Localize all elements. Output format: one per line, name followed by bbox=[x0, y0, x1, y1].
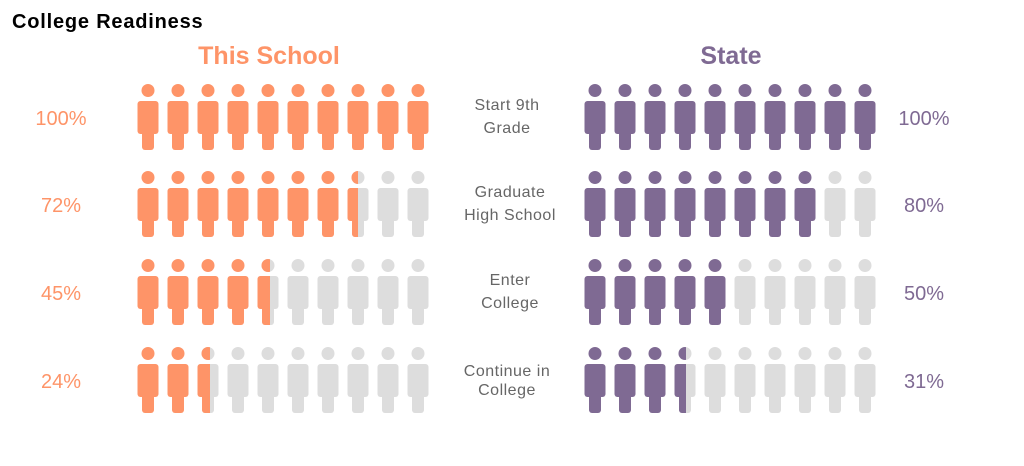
heading: State: State bbox=[700, 42, 762, 70]
row: Start 9th Grade: 100% bbox=[898, 108, 950, 130]
row: Start 9th Grade: Start 9th bbox=[475, 97, 539, 114]
row: Continue in College: 24% bbox=[41, 371, 81, 393]
row: Enter College bbox=[41, 259, 944, 325]
row: Enter College: College bbox=[481, 295, 539, 312]
row: Start 9th Grade: 100% bbox=[35, 108, 87, 130]
row: Graduate High School: 80% bbox=[904, 195, 944, 217]
row: Enter College: 45% bbox=[41, 283, 81, 305]
row: Enter College: 50% bbox=[904, 283, 944, 305]
heading: This School: This School bbox=[198, 42, 340, 70]
row: Continue in College: 31% bbox=[904, 371, 944, 393]
row: Enter College: Enter bbox=[490, 272, 531, 289]
title: College Readiness bbox=[12, 11, 203, 33]
row: Continue in College bbox=[41, 347, 944, 413]
row: Start 9th Grade: Grade bbox=[484, 120, 530, 137]
row: Graduate High School: Graduate bbox=[475, 184, 545, 201]
row: Graduate High School: 72% bbox=[41, 195, 81, 217]
row: Start 9th Grade bbox=[35, 84, 950, 150]
row: Graduate High School bbox=[41, 171, 944, 237]
row: Graduate High School: High School bbox=[464, 207, 556, 224]
row: Continue in College: College bbox=[478, 382, 536, 399]
row: Continue in College: Continue in bbox=[464, 363, 550, 380]
